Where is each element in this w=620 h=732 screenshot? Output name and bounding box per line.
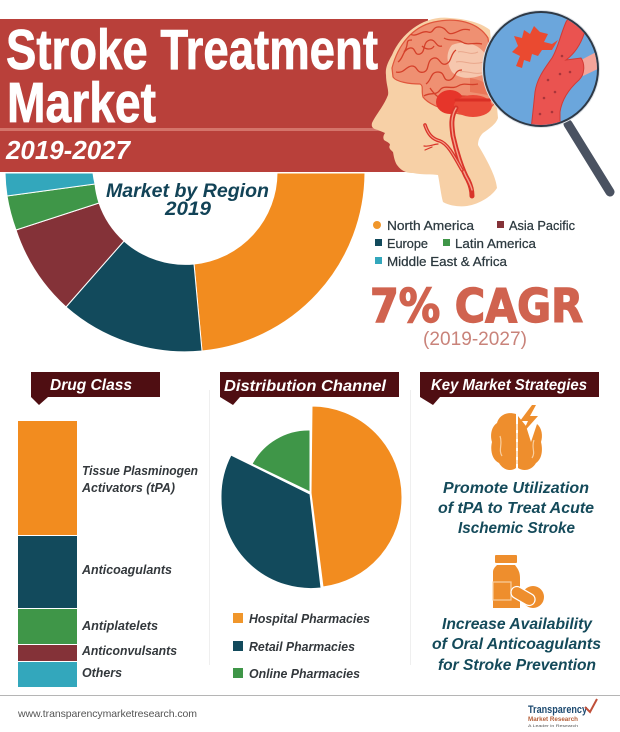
text: strategy one: of tPA to Treat Acute: [438, 500, 594, 517]
callout: CAGR: (2019-2027): [423, 329, 527, 350]
text: strategy two: [432, 616, 601, 674]
panel: key market strategies: [420, 372, 601, 674]
heading: distribution channel: [220, 372, 399, 405]
donut heading: [106, 181, 269, 220]
legend: regions: Latin America: [455, 236, 537, 251]
logo: Transparency: [528, 704, 588, 716]
donut heading: 2019: [164, 199, 211, 220]
legend: regions: [373, 218, 575, 269]
legend: regions: Middle East & Africa: [387, 254, 508, 269]
heading: key market strategies: [420, 372, 599, 405]
text: strategy one: Ischemic Stroke: [458, 520, 575, 537]
stacked bar labels: Anticoagulants: [81, 563, 172, 577]
donut heading: Market by Region: [106, 181, 269, 202]
callout: CAGR: 7% CAGR: [370, 279, 583, 333]
arteries: [424, 100, 490, 196]
brain: [392, 20, 496, 117]
logo: Market Research: [528, 716, 578, 723]
panel: distribution channel: [220, 372, 402, 681]
logo: A Leader in Research: [528, 723, 578, 728]
logo: [528, 699, 597, 728]
stacked bar labels: Anticonvulsants: [81, 644, 177, 658]
donut chart: market by region: [5, 173, 365, 352]
section dividers: [210, 390, 410, 665]
pie legend: Retail Pharmacies: [249, 640, 355, 654]
footer url: www.transparencymarketresearch.com: [17, 708, 197, 720]
panel: drug class: [18, 372, 198, 687]
heading: distribution channel: Distribution Channel: [224, 378, 387, 395]
subtitle years: 2019-2027: [5, 135, 132, 165]
icon: brain with lightning bolt: [491, 405, 542, 470]
stacked bar labels: [81, 464, 198, 680]
text: strategy two: Increase Availability: [442, 616, 593, 633]
stacked bar labels: Activators (tPA): [81, 481, 175, 495]
icon: magnifying glass: [482, 8, 610, 192]
heading: drug class: [31, 372, 160, 405]
pie chart: [221, 406, 402, 589]
illustration: head with brain and arteries: [372, 18, 498, 206]
legend: regions: Asia Pacific: [509, 218, 575, 233]
pie legend: Hospital Pharmacies: [249, 612, 370, 626]
title: Market: [7, 71, 156, 135]
pie legend: Online Pharmacies: [249, 667, 360, 681]
legend: regions: North America: [387, 218, 475, 233]
legend: regions: Europe: [387, 236, 428, 251]
stacked bar labels: Others: [82, 666, 122, 680]
stacked bar labels: Antiplatelets: [81, 619, 158, 633]
title: Stroke Treatment: [6, 18, 378, 82]
icon: medicine bottle and pills: [493, 555, 544, 608]
stacked bar: [18, 421, 77, 687]
stacked bar labels: Tissue Plasminogen: [82, 464, 198, 478]
header banner: [0, 19, 428, 172]
text: strategy two: for Stroke Prevention: [438, 657, 596, 674]
magnifier handle: [568, 124, 610, 192]
text: strategy two: of Oral Anticoagulants: [432, 636, 601, 653]
heading: key market strategies: Key Market Strategies: [431, 377, 587, 394]
pie legend: [233, 612, 370, 681]
footer rule: [0, 694, 620, 696]
text: strategy one: Promote Utilization: [443, 480, 589, 497]
heading: drug class: Drug Class: [50, 377, 132, 394]
text: strategy one: [438, 480, 594, 537]
title: [6, 18, 378, 135]
